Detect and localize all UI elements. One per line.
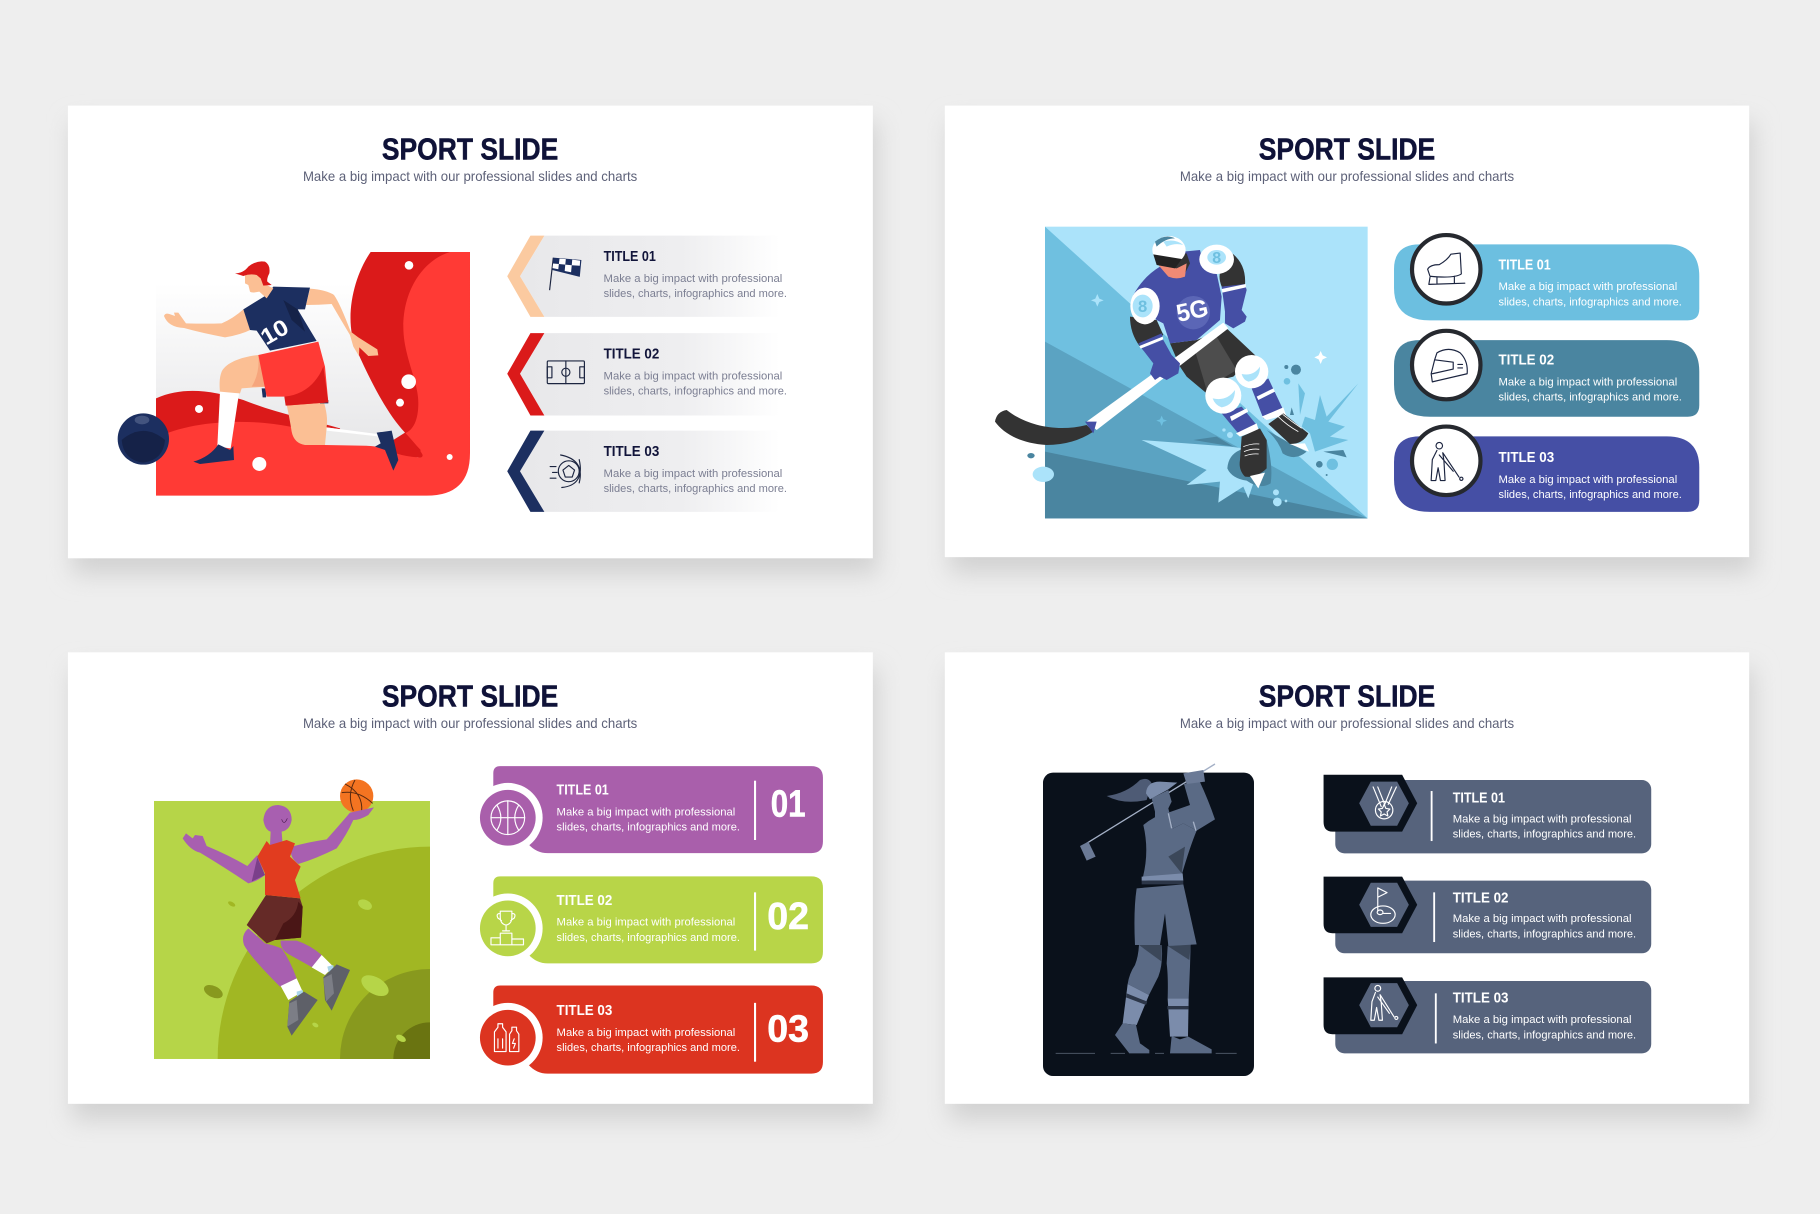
card: ball item: TITLE 03 [604, 444, 659, 460]
card: skate item: Make a big impact with professional [1498, 281, 1677, 293]
card: golfer item [1324, 977, 1651, 1053]
card: bottle item: 03 [767, 1008, 809, 1051]
card: trophy item: TITLE 02 [557, 893, 612, 909]
card: bottle item: slides, charts, infographics and more. [557, 1042, 740, 1054]
illustration: soccer player [118, 252, 470, 496]
icon: helmet [1412, 331, 1480, 399]
card: basketball item: slides, charts, infographics and more. [557, 821, 740, 833]
icon: golfer [1371, 985, 1398, 1020]
icon: ice skate [1412, 235, 1480, 304]
icon: flag in hole [1371, 888, 1395, 923]
heading: SPORT SLIDE [382, 132, 558, 167]
card: basketball item: TITLE 01 [557, 783, 609, 799]
icon: basketball [491, 801, 525, 835]
card: golf hole item: TITLE 02 [1453, 890, 1508, 906]
card: skate item: TITLE 01 [1498, 257, 1551, 273]
card: golfer item: Make a big impact with professional [1453, 1014, 1631, 1026]
card: golf hole item [1324, 877, 1651, 953]
card: skate item: slides, charts, infographics and more. [1498, 296, 1682, 308]
card: field item [507, 333, 787, 416]
card: helmet item: Make a big impact with professional [1498, 376, 1677, 388]
card: helmet item: slides, charts, infographics and more. [1498, 391, 1682, 403]
card: medal item [1324, 775, 1651, 853]
card: basketball item: 01 [771, 783, 806, 826]
icon: trophy podium [491, 911, 523, 945]
icon: soccer field [547, 361, 584, 384]
illustration: basketball player [154, 779, 430, 1059]
card: bottle item: Make a big impact with professional [557, 1027, 735, 1039]
subtitle: Make a big impact with our professional slides and charts [303, 168, 637, 184]
card: medal item: Make a big impact with professional [1453, 813, 1631, 825]
card: helmet item: TITLE 02 [1498, 352, 1554, 368]
icon: water bottles [494, 1024, 519, 1052]
card: flag item: Make a big impact with professional [604, 273, 782, 285]
card: ball item: slides, charts, infographics and more. [604, 483, 787, 495]
icon: checkered flag [550, 258, 581, 290]
card: bottle item [473, 985, 823, 1074]
card: field item: Make a big impact with professional [604, 371, 782, 383]
card: bottle item: TITLE 03 [557, 1003, 612, 1019]
card: golf hole item: Make a big impact with professional [1453, 913, 1631, 925]
card: medal item: TITLE 01 [1453, 791, 1505, 807]
heading: SPORT SLIDE [1259, 678, 1435, 713]
card: basketball item [473, 766, 823, 853]
card: flag item [507, 236, 787, 317]
card: ball item [507, 431, 787, 512]
card: field item: slides, charts, infographics and more. [604, 386, 787, 398]
icon: medal [1373, 787, 1396, 819]
card: golfer item: slides, charts, infographics and more. [1498, 489, 1682, 501]
card: skate item [1394, 235, 1699, 320]
card: golfer item [1394, 427, 1699, 512]
shoulder number: 8 [1138, 297, 1147, 316]
card: helmet item [1394, 331, 1699, 417]
illustration: hockey player [995, 227, 1368, 518]
card: field item: TITLE 02 [604, 347, 659, 363]
card: medal item: slides, charts, infographics and more. [1453, 828, 1636, 840]
heading: SPORT SLIDE [382, 678, 558, 713]
panel: golf slide [945, 652, 1754, 1120]
subtitle: Make a big impact with our professional slides and charts [1180, 168, 1514, 184]
jersey number: 10 [256, 313, 293, 350]
card: ball item: Make a big impact with professional [604, 468, 782, 480]
shoulder number: 8 [1212, 250, 1221, 267]
card: golfer item: TITLE 03 [1498, 450, 1554, 466]
card: golfer item: Make a big impact with professional [1498, 474, 1677, 486]
card: trophy item [473, 876, 823, 963]
card: flag item: TITLE 01 [604, 249, 656, 265]
card: golfer item: TITLE 03 [1453, 990, 1508, 1006]
card: basketball item: Make a big impact with professional [557, 806, 735, 818]
icon: golfer [1412, 427, 1480, 495]
card: trophy item: Make a big impact with professional [557, 917, 735, 929]
jersey text: 5G [1174, 295, 1211, 328]
icon: soccer ball [550, 455, 580, 487]
subtitle: Make a big impact with our professional slides and charts [303, 715, 637, 731]
panel: soccer slide [68, 106, 877, 575]
card: golf hole item: slides, charts, infographics and more. [1453, 928, 1636, 940]
card: flag item: slides, charts, infographics and more. [604, 288, 787, 300]
heading: SPORT SLIDE [1259, 132, 1435, 167]
card: golfer item: slides, charts, infographics and more. [1453, 1029, 1636, 1041]
card: trophy item: 02 [767, 895, 809, 938]
panel: hockey slide [945, 106, 1754, 573]
illustration: golfer [1043, 764, 1254, 1076]
subtitle: Make a big impact with our professional slides and charts [1180, 715, 1514, 731]
card: trophy item: slides, charts, infographics and more. [557, 932, 740, 944]
panel: basketball slide [66, 652, 884, 1126]
